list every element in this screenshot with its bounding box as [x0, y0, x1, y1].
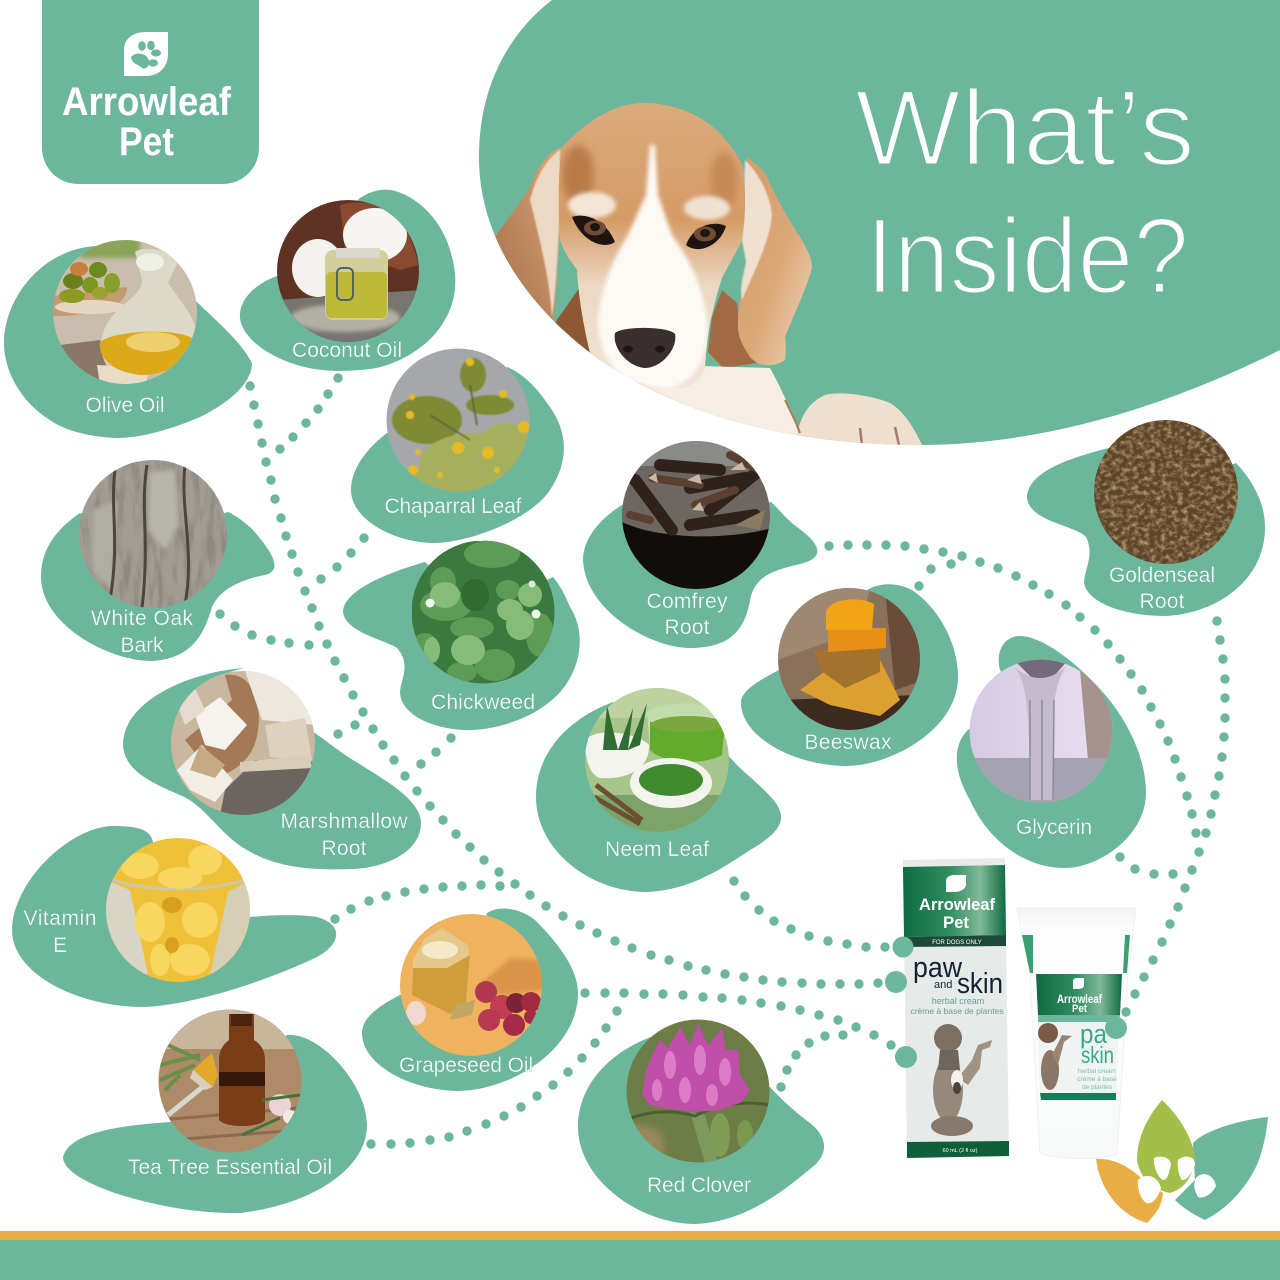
label: Comfrey [646, 590, 728, 613]
photo: honeycomb [778, 588, 925, 732]
connector: beeswax [919, 564, 951, 586]
panel: glycerin [957, 636, 1146, 868]
photo: red clover [615, 1019, 770, 1165]
box product name: and [934, 979, 952, 991]
connector: goldenseal root [1126, 621, 1225, 1012]
dog on box [931, 1024, 992, 1136]
photo: glycerin pour [968, 658, 1116, 806]
label: Glycerin [1016, 816, 1092, 839]
tube text: herbal cream [1078, 1068, 1116, 1075]
photo: olive oil [50, 238, 200, 388]
icon: leaf with paw [124, 32, 168, 76]
connector: glycerin [1120, 857, 1173, 874]
box logo: Arrowleaf [919, 895, 995, 914]
photo: neem [585, 688, 729, 832]
title: Inside? [866, 195, 1189, 316]
connector: grapeseed oil [585, 993, 891, 1045]
header blob with dog [479, 0, 1280, 445]
product box [903, 858, 1009, 1158]
label: Grapeseed Oil [399, 1054, 533, 1077]
photo: bark [79, 460, 227, 608]
label: Chaparral Leaf [384, 495, 522, 518]
title: What’s [855, 67, 1195, 188]
box product name: crème à base de plantes [910, 1006, 1004, 1016]
panel: coconut oil [240, 190, 455, 371]
label: Root [664, 616, 710, 639]
label [1109, 564, 1215, 613]
photo: coconut and jar [275, 198, 421, 345]
label: White Oak [91, 607, 194, 630]
label: Coconut Oil [292, 339, 402, 362]
label: Root [322, 837, 367, 860]
photo: goldenseal [1094, 420, 1238, 564]
photo: tea tree oil [158, 1009, 302, 1153]
label: Vitamin [24, 907, 96, 930]
box product name [910, 952, 1004, 1154]
label [24, 907, 96, 957]
connector end dots [885, 936, 1127, 1068]
photo: capsules [106, 838, 250, 985]
photo: chaparral shrub [385, 348, 531, 497]
product tube [1017, 908, 1136, 1159]
panel: marshmallow root [123, 668, 421, 869]
icon: leaves with paw print [1096, 1100, 1268, 1223]
label: Chickweed [431, 691, 535, 714]
tube text: Pet [1072, 1003, 1087, 1015]
label: Beeswax [804, 731, 892, 754]
box logo: FOR DOGS ONLY [932, 940, 982, 946]
label: Neem Leaf [605, 838, 709, 861]
box product name: 60 mL (2 fl oz) [943, 1148, 978, 1154]
photo: beagle dog [493, 100, 922, 445]
panel: goldenseal root [1027, 420, 1265, 616]
tube text: pa [1080, 1019, 1108, 1049]
panel: grapeseed oil [362, 909, 578, 1091]
photo: marshmallow root [171, 671, 315, 815]
panel: tea tree essential oil [63, 1009, 367, 1213]
label: Red Clover [647, 1174, 751, 1197]
panel: white oak bark [41, 460, 275, 661]
nose [615, 328, 675, 368]
title [855, 67, 1195, 316]
connector: red clover [781, 1035, 843, 1087]
panel: red clover [578, 1019, 824, 1224]
box logo [919, 875, 995, 946]
panel: olive oil [4, 238, 252, 438]
logo panel [42, 0, 259, 184]
label [280, 810, 408, 860]
tube text: de plantes [1082, 1084, 1113, 1091]
photo: chickweed leaves [412, 540, 556, 685]
tube text [1057, 978, 1117, 1091]
connector: tea tree oil [371, 1011, 617, 1144]
photo: grapeseed oil [400, 914, 545, 1057]
box header band [903, 865, 1006, 937]
connector: coconut oil [280, 378, 338, 449]
label: Bark [120, 634, 164, 657]
label: Goldenseal [1109, 564, 1215, 587]
box product name: paw [913, 952, 963, 984]
label: Olive Oil [86, 394, 164, 417]
panel: beeswax [741, 584, 958, 766]
connector: olive oil [250, 386, 878, 984]
photo: comfrey root [622, 441, 772, 595]
panel: neem leaf [536, 688, 781, 892]
connector: chaparral leaf [321, 538, 364, 579]
connector: marshmallow root [338, 725, 355, 734]
dotted connectors [220, 378, 1225, 1144]
panel: vitamin e [12, 826, 336, 1007]
label [91, 607, 194, 657]
tube text: Arrowleaf [1057, 992, 1103, 1006]
box product name: skin [957, 968, 1003, 1000]
panel: comfrey root [583, 441, 817, 648]
label: E [53, 934, 67, 957]
label [646, 590, 728, 639]
label: Marshmallow [280, 810, 408, 833]
panel: chaparral leaf [351, 348, 564, 543]
connector: comfrey root [829, 545, 1196, 833]
eyes [572, 216, 615, 245]
dog on tube [1038, 1023, 1072, 1090]
connector: chickweed [421, 738, 451, 764]
box product name: herbal cream [932, 996, 984, 1006]
tube text: crème à base [1077, 1076, 1117, 1083]
panel: chickweed [343, 540, 580, 730]
connector: white oak bark [220, 614, 309, 645]
label: Tea Tree Essential Oil [128, 1156, 332, 1179]
box logo: Pet [943, 913, 969, 932]
connector: neem leaf [734, 881, 885, 947]
logo wordmark: Arrowleaf [62, 80, 232, 124]
footer band [0, 1231, 1280, 1280]
logo wordmark [62, 80, 232, 164]
logo wordmark: Pet [119, 120, 174, 164]
connector: vitamin e [335, 885, 500, 919]
label: Root [1140, 590, 1185, 613]
tube text: skin [1081, 1042, 1114, 1068]
